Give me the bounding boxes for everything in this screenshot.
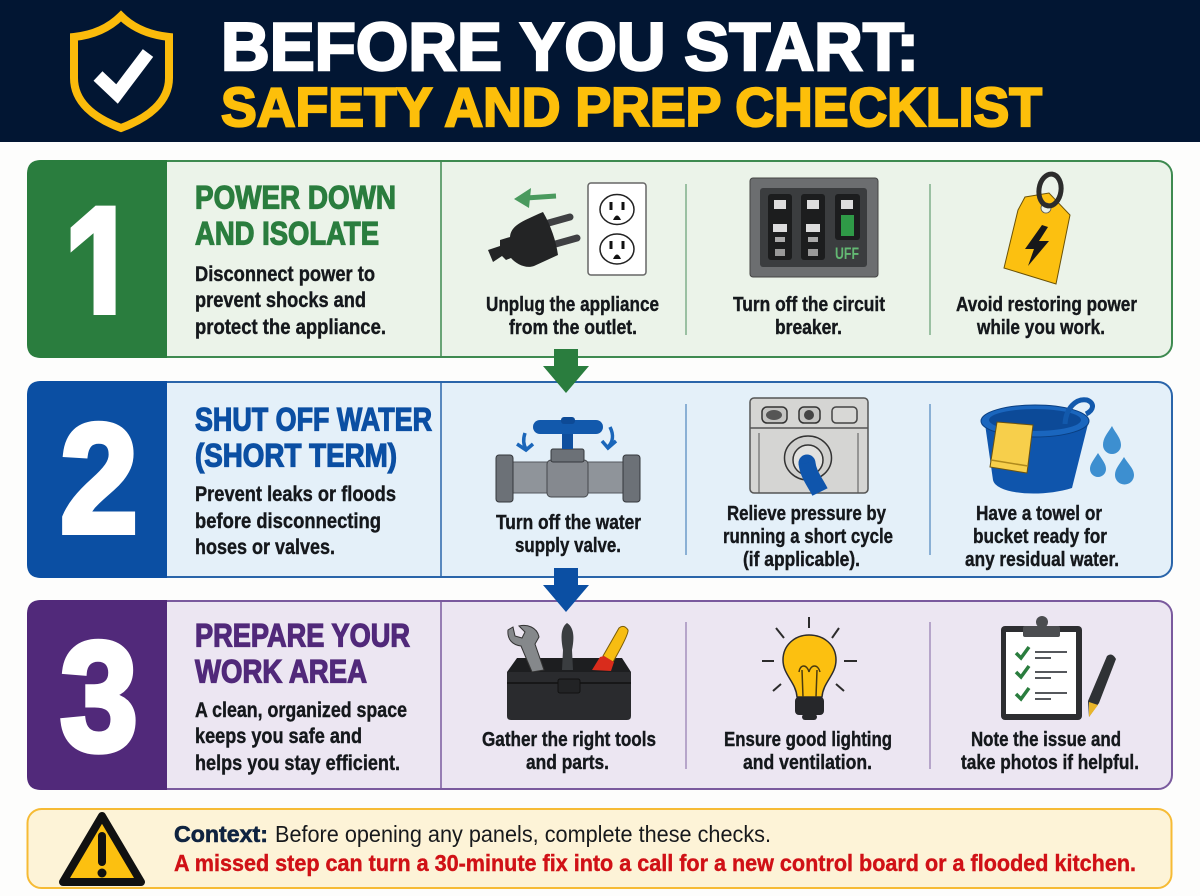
context text: A missed step can turn a 30-minute fix into a call for a new control board or a flooded kitchen.	[174, 850, 1136, 876]
description: shut off water: Prevent leaks or floods	[195, 483, 396, 506]
header banner	[0, 0, 1200, 142]
description: prepare work area: helps you stay efficient.	[195, 752, 400, 775]
callout: context warning	[28, 809, 1172, 888]
caption: note the issue	[961, 729, 1139, 774]
title	[221, 9, 1042, 138]
step number 2: 2	[60, 392, 138, 565]
icon: light bulb	[762, 617, 857, 720]
heading: prepare work area: WORK AREA	[195, 654, 367, 690]
caption: breaker	[733, 294, 885, 339]
context text: Context:	[174, 821, 268, 847]
caption: relieve pressure: Relieve pressure by	[727, 503, 887, 525]
description: power down: Disconnect power to	[195, 263, 375, 286]
description: shut off water: before disconnecting	[195, 510, 381, 533]
caption: towel or bucket: bucket ready for	[973, 526, 1107, 548]
description: power down	[195, 263, 386, 339]
caption: towel or bucket: Have a towel or	[976, 503, 1102, 525]
caption: avoid restoring: while you work.	[976, 317, 1105, 339]
heading: shut off water	[195, 402, 432, 474]
step number 3: 3	[60, 610, 138, 783]
icon: plug and outlet	[488, 183, 646, 275]
caption: lighting: Ensure good lighting	[724, 729, 892, 751]
heading: shut off water: SHUT OFF WATER	[195, 402, 432, 438]
caption: note the issue: Note the issue and	[971, 729, 1121, 751]
icon: shield with check	[74, 16, 169, 128]
caption: tools	[482, 729, 656, 774]
caption: relieve pressure	[723, 503, 893, 571]
caption: breaker: Turn off the circuit	[733, 294, 885, 316]
caption: avoid restoring: Avoid restoring power	[956, 294, 1137, 316]
caption: breaker: breaker.	[775, 317, 842, 339]
description: power down: prevent shocks and	[195, 289, 366, 312]
caption: relieve pressure: (if applicable).	[743, 549, 860, 571]
arrow: step 2 to step 3	[543, 568, 589, 612]
icon: toolbox	[507, 623, 631, 720]
heading: prepare work area: PREPARE YOUR	[195, 618, 410, 654]
caption: towel or bucket: any residual water.	[965, 549, 1119, 571]
description: prepare work area: keeps you safe and	[195, 725, 362, 748]
icon: warning triangle	[63, 816, 141, 882]
heading: power down: AND ISOLATE	[195, 216, 379, 252]
caption: valve: supply valve.	[515, 535, 621, 557]
panel: step 3 prepare work area	[27, 600, 1172, 790]
description: prepare work area	[195, 699, 407, 775]
caption: unplug: Unplug the appliance	[486, 294, 659, 316]
icon: clipboard and pen	[1001, 616, 1116, 720]
caption: lighting	[724, 729, 892, 774]
description: prepare work area: A clean, organized space	[195, 699, 407, 722]
icon: warning tag	[1004, 173, 1070, 284]
caption: lighting: and ventilation.	[743, 752, 872, 774]
caption: unplug: from the outlet.	[509, 317, 637, 339]
description: power down: protect the appliance.	[195, 316, 386, 339]
panel: step 1 power down	[27, 160, 1172, 378]
context text	[174, 821, 1136, 876]
title: SAFETY AND PREP CHECKLIST	[221, 76, 1042, 138]
caption: valve	[496, 512, 641, 557]
heading: shut off water: (SHORT TERM)	[195, 438, 397, 474]
caption: valve: Turn off the water	[496, 512, 641, 534]
icon: water valve	[496, 417, 640, 502]
panel: step 2 shut off water	[27, 381, 1172, 578]
icon: bucket with towel and drops	[981, 400, 1134, 494]
step number 1: 1	[63, 168, 140, 378]
icon: circuit breaker: UFF	[835, 244, 859, 263]
icon: washer hose connection	[750, 398, 868, 493]
context text: Before opening any panels, complete these checks.	[275, 821, 771, 847]
caption: towel or bucket	[965, 503, 1119, 571]
description: shut off water	[195, 483, 396, 559]
description: shut off water: hoses or valves.	[195, 536, 335, 559]
caption: tools: Gather the right tools	[482, 729, 656, 751]
caption: tools: and parts.	[526, 752, 609, 774]
arrow: step 1 to step 2	[543, 349, 589, 393]
caption: unplug	[486, 294, 659, 339]
caption: avoid restoring	[956, 294, 1137, 339]
title: BEFORE YOU START:	[221, 9, 919, 85]
caption: note the issue: take photos if helpful.	[961, 752, 1139, 774]
heading: power down	[195, 180, 396, 252]
heading: power down: POWER DOWN	[195, 180, 396, 216]
icon: circuit breaker	[750, 178, 878, 277]
caption: relieve pressure: running a short cycle	[723, 526, 893, 548]
heading: prepare work area	[195, 618, 410, 690]
